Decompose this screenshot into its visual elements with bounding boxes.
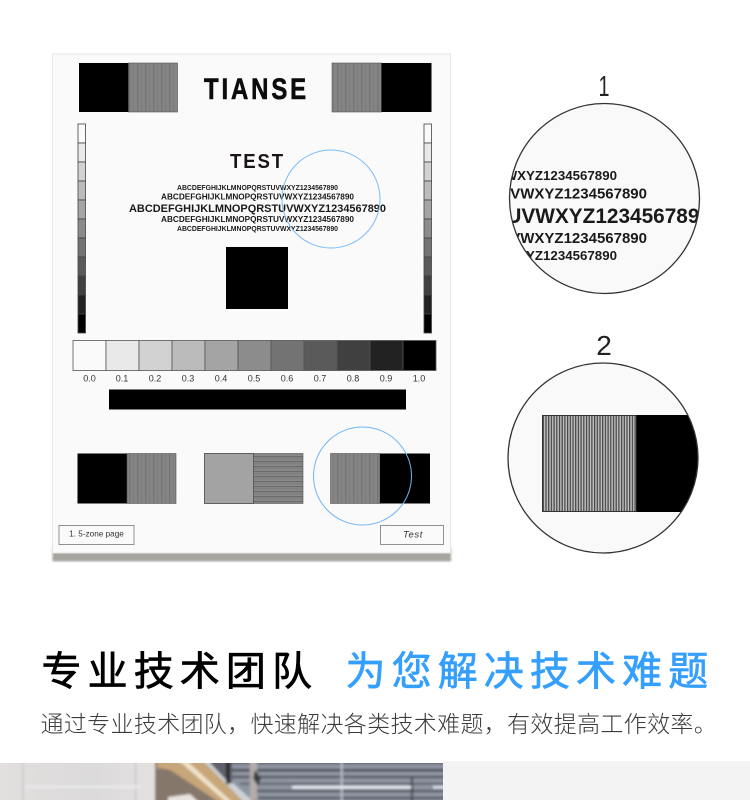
enlarged text lines: ABCDEFGHIJKLMNOPQRSTUVWXYZ1234567890 <box>223 205 711 228</box>
top right test patch <box>332 63 432 112</box>
subheading: 通过专业技术团队，快速解决各类技术难题，有效提高工作效率。 <box>40 711 717 737</box>
test label box: Test <box>403 530 423 540</box>
alphabet sample lines <box>129 185 386 233</box>
magnifier 1 with enlarged text <box>508 102 700 294</box>
gray scale labels: 0.6 <box>281 374 293 384</box>
magnifier 2 outline <box>508 363 698 553</box>
enlarged text lines: ABCDEFGHIJKLMNOPQRSTUVWXYZ1234567890 <box>295 230 647 247</box>
alphabet sample lines: ABCDEFGHIJKLMNOPQRSTUVWXYZ1234567890 <box>177 226 338 233</box>
horizontal gray scale <box>73 340 436 370</box>
sheet shadow <box>52 548 451 562</box>
gray scale labels: 0.8 <box>347 374 359 384</box>
highlight circle 1 <box>282 150 380 248</box>
magnifier number 1: 1 <box>598 71 610 103</box>
gray scale labels: 0.2 <box>149 374 161 384</box>
center black square <box>226 247 288 309</box>
right vertical gray scale <box>424 124 432 333</box>
bottom right test patch <box>330 454 430 504</box>
alphabet sample lines: ABCDEFGHIJKLMNOPQRSTUVWXYZ1234567890 <box>161 192 355 202</box>
bottom left test patch <box>78 454 176 504</box>
alphabet sample lines: ABCDEFGHIJKLMNOPQRSTUVWXYZ1234567890 <box>129 203 386 215</box>
heading black part: 专业技术团队 <box>42 650 318 694</box>
gray scale labels: 0.1 <box>116 374 128 384</box>
alphabet sample lines: ABCDEFGHIJKLMNOPQRSTUVWXYZ1234567890 <box>177 185 338 192</box>
enlarged text lines: ABCDEFGHIJKLMNOPQRSTUVWXYZ1234567890 <box>305 248 617 263</box>
gray scale labels: 0.0 <box>83 374 96 384</box>
enlarged text lines: ABCDEFGHIJKLMNOPQRSTUVWXYZ1234567890 <box>305 168 617 183</box>
bottom office photo <box>0 763 443 800</box>
magnifier 1 outline <box>510 104 700 294</box>
gray scale labels: 0.7 <box>314 374 326 384</box>
top left test patch <box>79 63 178 112</box>
gray scale labels: 0.5 <box>248 374 260 384</box>
left vertical gray scale <box>78 124 86 333</box>
highlight circle 2 <box>314 427 412 525</box>
gray scale labels: 0.9 <box>380 374 392 384</box>
sheet paper <box>52 54 450 553</box>
bottom middle test patch <box>204 454 303 504</box>
magnifier 2 with enlarged patch <box>508 363 706 553</box>
enlarged stripe and black patch <box>542 415 706 512</box>
gray scale labels: 0.4 <box>215 374 227 384</box>
gray scale labels <box>83 374 425 384</box>
enlarged text lines <box>510 171 698 260</box>
page label box <box>59 526 134 544</box>
gray scale labels: 1.0 <box>413 374 425 384</box>
heading blue part: 为您解决技术难题 <box>346 650 714 694</box>
gray scale labels: 0.3 <box>182 374 194 384</box>
alphabet sample lines: ABCDEFGHIJKLMNOPQRSTUVWXYZ1234567890 <box>161 215 355 224</box>
main heading <box>42 650 714 694</box>
magnifier number 2: 2 <box>596 330 612 361</box>
black bar <box>109 390 406 410</box>
test page sheet <box>52 54 451 562</box>
enlarged text lines: ABCDEFGHIJKLMNOPQRSTUVWXYZ1234567890 <box>295 186 647 202</box>
test label box <box>380 526 444 544</box>
page label box: 1. 5-zone page <box>69 530 124 538</box>
brand title: TIANSE <box>204 73 309 106</box>
test heading: TEST <box>230 151 285 173</box>
bottom gray panel <box>443 761 750 800</box>
